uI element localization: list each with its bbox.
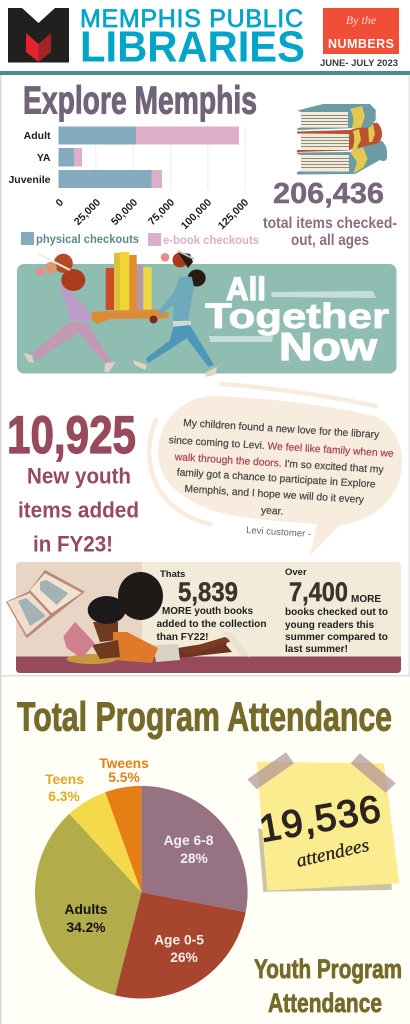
label: Age 6-8 xyxy=(164,833,214,866)
category labels: YA xyxy=(37,152,51,164)
panel: youth collection stats xyxy=(6,562,401,673)
label: Teens: 6.3% xyxy=(48,789,80,804)
heading: Youth Program Attendance xyxy=(254,954,402,1018)
bar: Adult xyxy=(58,126,239,144)
axis tick labels: 125,000 xyxy=(216,197,251,232)
stat: 5,839 more youth books: than FY22! xyxy=(156,632,208,643)
label: Teens xyxy=(45,772,84,804)
bar chart: checkouts by age group xyxy=(8,126,251,232)
pie chart: attendance by age xyxy=(35,756,248,999)
stat: 7,400 more books checked out xyxy=(285,567,388,655)
speech bubble: customer quote: walk through the doors. I'm so excited that my xyxy=(173,452,385,476)
label: Age 6-8: 28% xyxy=(180,851,208,866)
figure: right walker xyxy=(133,251,217,377)
stat: 5,839 more youth books xyxy=(156,569,266,643)
axis tick labels: 25,000 xyxy=(72,197,103,228)
label: Tweens xyxy=(99,756,149,785)
speech bubble: customer quote xyxy=(149,384,402,556)
stat: total checkouts xyxy=(263,178,397,249)
speech bubble: customer quote: since coming to Levi. We feel like family when we xyxy=(168,435,394,460)
axis tick labels: 50,000 xyxy=(109,197,140,228)
legend: e-book checkouts xyxy=(163,233,259,247)
category labels: Juvenile xyxy=(8,174,51,186)
speech bubble: customer quote: Memphis, and I hope we will do it every xyxy=(184,484,365,506)
figure: left walker xyxy=(23,254,116,373)
panel: program attendance xyxy=(0,675,410,1024)
stat: 5,839 more youth books: MORE youth books xyxy=(162,606,253,617)
stat: new youth items xyxy=(7,406,139,556)
heading: Youth Program Attendance: Attendance xyxy=(268,988,382,1018)
label: Tweens: Tweens xyxy=(99,756,149,771)
stat: 7,400 more books checked out: young readers this xyxy=(285,620,374,631)
icon: stack of books xyxy=(297,104,387,174)
badge: by the numbers xyxy=(323,8,399,54)
icon: open book xyxy=(6,570,85,638)
label: Tweens: 5.5% xyxy=(108,770,140,785)
label: Age 0-5 xyxy=(154,932,204,965)
top book xyxy=(298,104,376,130)
stat: total checkouts: 206,436 xyxy=(273,178,384,210)
stat: 5,839 more youth books: added to the collection xyxy=(156,619,266,630)
category labels: Adult xyxy=(24,130,51,142)
stat: 7,400 more books checked out: MORE xyxy=(351,594,381,605)
stat: 7,400 more books checked out: books checked out to xyxy=(285,607,388,618)
banner text xyxy=(205,271,389,369)
middle book xyxy=(297,122,382,152)
banner text: Now xyxy=(279,326,378,369)
icon: library logo xyxy=(8,8,69,62)
stat: total checkouts: out, all ages xyxy=(291,232,369,249)
label: Adults xyxy=(65,902,108,935)
banner: All Together Now xyxy=(17,251,396,377)
banner text: Together xyxy=(205,297,389,336)
heading: Libraries: LIBRARIES xyxy=(80,24,305,72)
label: Age 0-5: 26% xyxy=(170,950,198,965)
label: Adults: Adults xyxy=(65,902,108,917)
bar: YA xyxy=(58,148,82,166)
axis tick labels: 75,000 xyxy=(146,197,177,228)
speech bubble: customer quote: year. xyxy=(261,505,284,518)
stat: 5,839 more youth books: Thats xyxy=(160,569,185,580)
banner text: All xyxy=(226,271,266,307)
stat: new youth items: New youth xyxy=(27,464,131,488)
tape xyxy=(247,752,294,789)
heading: Explore Memphis: Explore Memphis xyxy=(23,80,257,122)
badge: by the numbers: NUMBERS xyxy=(328,37,394,51)
category labels xyxy=(8,130,51,186)
figure: books on board xyxy=(92,252,169,324)
sticky note: attendees xyxy=(247,752,399,892)
badge: by the numbers: By the xyxy=(346,13,377,27)
bar: Juvenile xyxy=(58,170,162,188)
header xyxy=(0,5,410,75)
label: Teens: Teens xyxy=(45,772,84,787)
axis tick labels xyxy=(54,197,251,232)
stat: 5,839 more youth books: 5,839 xyxy=(178,577,238,607)
speech bubble: customer quote: Levi customer - xyxy=(246,525,311,540)
date: JUNE- JULY 2023 xyxy=(320,58,398,68)
sticky note: attendees: attendees xyxy=(294,835,371,872)
label: Age 6-8: Age 6-8 xyxy=(164,833,214,848)
legend xyxy=(21,232,259,247)
axis tick labels: 0 xyxy=(54,197,66,209)
speech bubble: customer quote: family got a chance to participate in Explore xyxy=(176,467,376,491)
stat: new youth items: in FY23! xyxy=(33,532,113,556)
stat: new youth items: 10,925 xyxy=(7,406,136,465)
label: Adults: 34.2% xyxy=(66,920,106,935)
tape xyxy=(351,753,396,793)
stat: new youth items: items added xyxy=(18,498,139,522)
stat: 7,400 more books checked out: Over xyxy=(285,567,307,578)
stat: 7,400 more books checked out: 7,400 xyxy=(289,577,348,607)
figure: girl reading xyxy=(63,572,250,664)
sticky note: attendees: 19,536 xyxy=(256,788,384,851)
axis tick labels: 100,000 xyxy=(179,197,214,232)
legend: physical checkouts xyxy=(36,232,139,246)
bottom book xyxy=(297,140,387,174)
stat: 7,400 more books checked out: summer compared to xyxy=(285,632,388,643)
stat: 7,400 more books checked out: last summer! xyxy=(285,644,348,655)
heading: Memphis Public: MEMPHIS PUBLIC xyxy=(80,5,303,33)
speech bubble: customer quote: My children found a new love for the library xyxy=(183,418,380,441)
label: Age 0-5: Age 0-5 xyxy=(154,932,204,948)
